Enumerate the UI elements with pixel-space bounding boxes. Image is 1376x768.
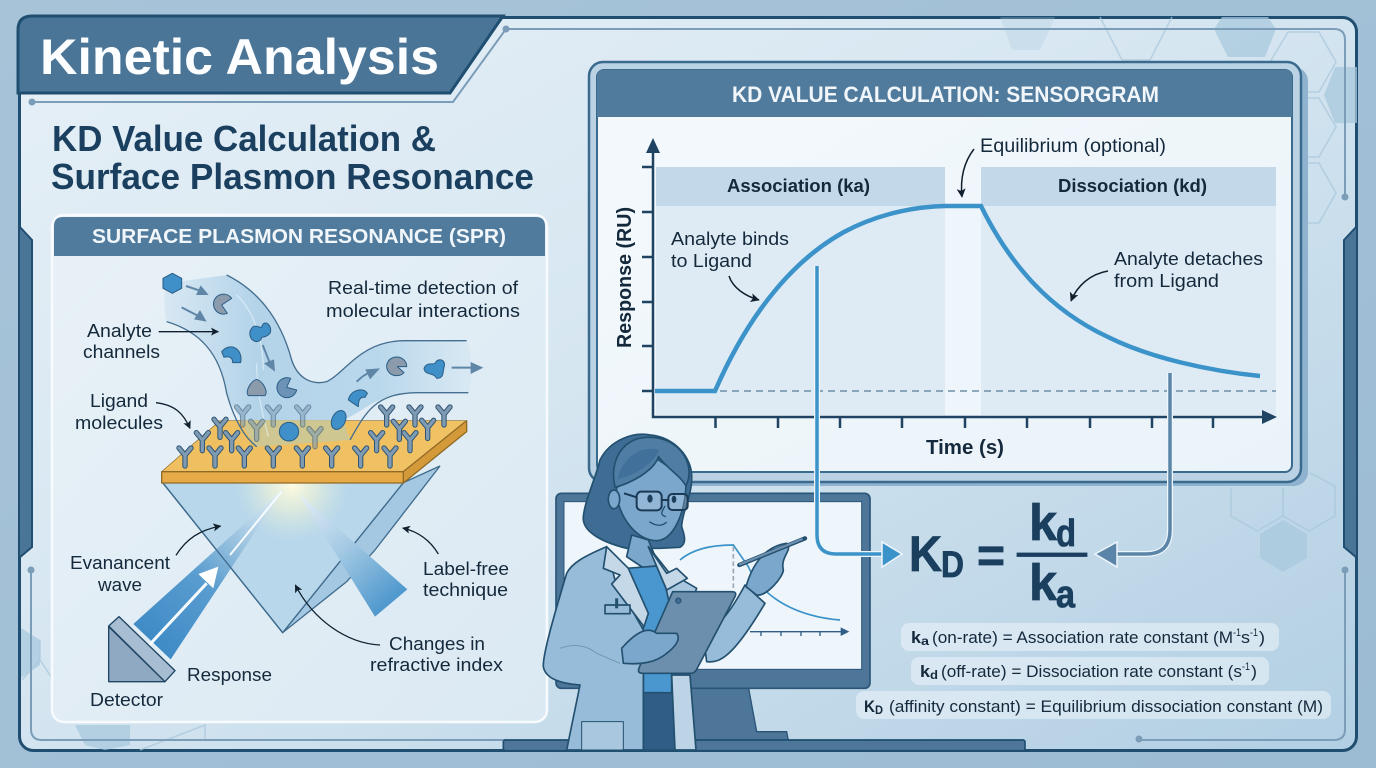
analyte molecules: [163, 273, 445, 441]
formula: KD equals kd over ka: K: [909, 526, 942, 582]
equilibrium band: [945, 206, 981, 415]
sensorgram heading: [597, 70, 1292, 117]
definition: KD: D: [875, 703, 883, 717]
annotation: equilibrium: Equilibrium (optional): [980, 136, 1166, 157]
connector: dissociation to KD: [1095, 373, 1170, 567]
definition: ka: (on-rate) = Association rate constant (M: [932, 628, 1233, 647]
connector: association to KD: [817, 266, 902, 567]
left hand: [622, 630, 678, 664]
label: detector: Detector: [90, 690, 163, 710]
arrow: refractive index: [295, 585, 380, 645]
prism back face: [283, 466, 440, 633]
chart: sensorgram: [614, 136, 1277, 459]
axes: [642, 138, 1277, 428]
label: real-time detection: molecular interactions: [326, 301, 520, 321]
tablet: [639, 592, 736, 673]
definition: ka: a: [921, 634, 929, 648]
association band: [656, 167, 945, 415]
face: [617, 458, 686, 541]
label: changes in refractive index: [370, 634, 503, 675]
definition: kd: -1: [1242, 661, 1250, 673]
right hand and stylus: [739, 538, 805, 595]
ear: [608, 490, 620, 509]
formula: KD equals kd over ka: D: [941, 544, 964, 585]
panel heading: SURFACE PLASMON RESONANCE (SPR): [92, 226, 506, 248]
annotation: analyte binds: [671, 228, 789, 300]
formula: KD equals kd over ka: [909, 494, 1087, 616]
arrow: analyte channels: [159, 330, 218, 334]
frame side bars: [19, 226, 1357, 558]
definition: ka: k: [911, 628, 922, 647]
flow arrows: [182, 285, 483, 382]
definition: kd: d: [930, 668, 938, 682]
hair back: [583, 434, 692, 548]
dissociation band: Dissociation (kd): [1058, 176, 1207, 196]
label: evanescent wave: [70, 553, 170, 595]
outgoing light beam: [298, 493, 407, 617]
definition: KD: (affinity constant) = Equilibrium dissociation constant (M): [889, 697, 1323, 716]
light glow: [163, 483, 403, 632]
definition: KD: [856, 691, 1331, 719]
arrow: evanescent wave: [176, 526, 221, 555]
label: changes in refractive index: refractive index: [370, 655, 503, 675]
panel: surface plasmon resonance: [52, 215, 547, 722]
definition: kd: [911, 657, 1269, 685]
sensorgram heading: KD VALUE CALCULATION: SENSORGRAM: [732, 82, 1159, 107]
formula: KD equals kd over ka: k: [1029, 554, 1058, 611]
definition: ka: -1: [1250, 627, 1258, 639]
monitor body: [556, 493, 870, 688]
definition: kd: k: [920, 662, 931, 681]
definition: kd: ): [1251, 662, 1257, 681]
definition: KD: K: [864, 697, 876, 716]
formula: KD equals kd over ka: d: [1056, 513, 1076, 555]
neck: [627, 535, 660, 570]
panel heading: [54, 217, 545, 256]
label: changes in refractive index: Changes in: [389, 634, 485, 654]
response curve: [655, 206, 1260, 391]
annotation: equilibrium: [962, 136, 1166, 197]
formula: KD equals kd over ka: a: [1056, 574, 1076, 616]
label: label-free technique: Label-free: [423, 559, 509, 579]
label: real-time detection: Real-time detection of: [328, 278, 519, 298]
label: analyte channels: Analyte: [87, 321, 152, 341]
glasses: [624, 492, 688, 510]
annotation: analyte detaches: [1071, 248, 1263, 301]
monitor screen: [564, 502, 862, 669]
x-axis label: Time (s): [926, 437, 1004, 459]
label: ligand molecules: Ligand: [90, 391, 148, 411]
shirt: [627, 566, 672, 693]
desk: [503, 740, 1025, 751]
monitor stand: [673, 687, 788, 741]
definition: ka: ): [1259, 628, 1265, 647]
label: response: Response: [187, 665, 272, 685]
lab coat: [543, 547, 697, 750]
arrow: label-free: [403, 528, 438, 554]
formula: KD equals kd over ka: =: [977, 530, 1005, 583]
subtitle heading: [51, 118, 534, 197]
arm and sleeve: [703, 585, 765, 662]
annotation: analyte binds: to Ligand: [671, 250, 752, 271]
definition: kd: (off-rate) = Dissociation rate constant (s: [941, 662, 1242, 681]
dissociation band: [981, 167, 1276, 415]
computer monitor: [503, 493, 1025, 751]
incoming light beam: [133, 488, 284, 659]
label: evanescent wave: wave: [97, 575, 142, 595]
ligand molecules: [179, 407, 450, 466]
label: ligand molecules: molecules: [75, 413, 163, 433]
label: analyte channels: [83, 321, 160, 362]
definition: ka: -1: [1233, 627, 1241, 639]
mini sensorgram: [680, 545, 849, 636]
arrow: ligand molecules: [156, 403, 190, 428]
prism and beams: [109, 466, 440, 682]
title: Kinetic Analysis: [40, 29, 439, 85]
fringe: [614, 437, 689, 487]
white beam arrow: [148, 492, 282, 646]
label: real-time detection: [326, 278, 520, 321]
label: label-free technique: technique: [423, 580, 508, 600]
association band: Association (ka): [727, 176, 870, 196]
facial features: [647, 495, 676, 503]
label: label-free technique: [423, 559, 509, 600]
label: analyte channels: channels: [83, 342, 160, 362]
gold chip: [162, 421, 467, 483]
flow channel: [164, 275, 472, 420]
subtitle heading: KD Value Calculation &: [52, 118, 436, 159]
definition: ka: s: [1241, 628, 1250, 647]
label: evanescent wave: Evanancent: [70, 553, 170, 573]
annotation: analyte detaches: from Ligand: [1114, 270, 1219, 291]
annotation: analyte binds: Analyte binds: [671, 228, 789, 249]
definition: ka: [901, 623, 1279, 651]
gold sensor chip and flow channel: [156, 273, 483, 483]
detector: [109, 617, 175, 682]
subtitle heading: Surface Plasmon Resonance: [51, 156, 534, 197]
prism: [163, 483, 403, 633]
label: ligand molecules: [75, 391, 163, 433]
annotation: analyte detaches: Analyte detaches: [1114, 248, 1263, 269]
scientist: [543, 434, 805, 750]
y-axis label: Response (RU): [614, 207, 636, 348]
title banner: [18, 16, 503, 93]
panel: sensorgram: [589, 62, 1308, 486]
formula: KD equals kd over ka: k: [1029, 494, 1058, 551]
